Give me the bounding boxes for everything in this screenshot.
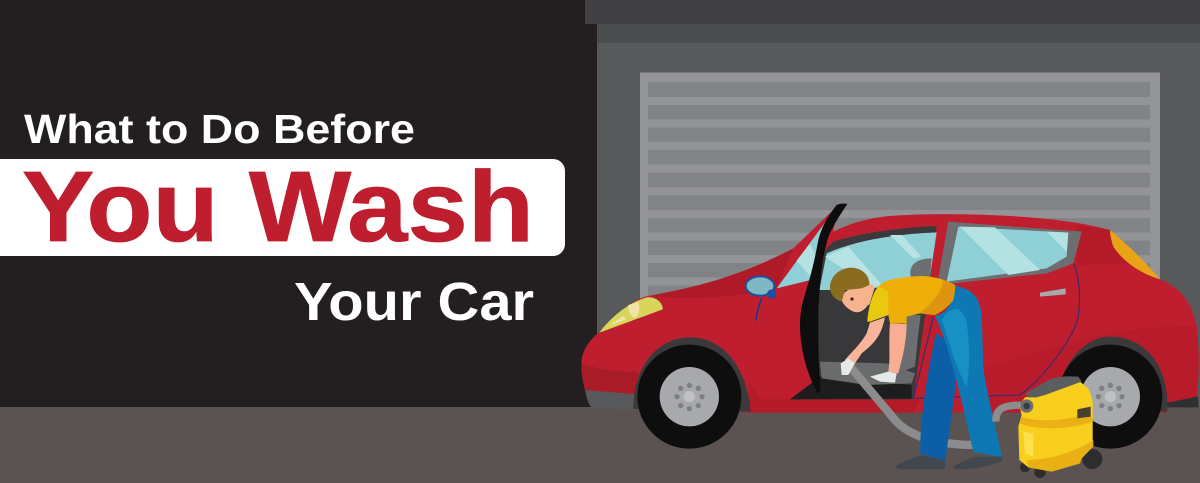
vacuum lower shade bbox=[1027, 440, 1093, 472]
vent bbox=[1077, 407, 1091, 418]
front wheel bbox=[633, 337, 751, 449]
headlight bbox=[599, 297, 663, 333]
shirt bbox=[867, 276, 955, 323]
title bbox=[0, 106, 565, 332]
tail light bbox=[1110, 230, 1160, 279]
casters bbox=[1020, 449, 1102, 478]
rear lower shade bbox=[983, 326, 1199, 413]
roller door bbox=[640, 72, 1160, 372]
banner bbox=[0, 159, 565, 256]
floor mat bbox=[790, 377, 912, 399]
illustration: car and person bbox=[581, 204, 1199, 478]
sill shade bbox=[748, 382, 920, 413]
lid bbox=[1025, 376, 1082, 397]
ground bbox=[0, 407, 1200, 483]
vacuum crease bbox=[1020, 413, 1093, 428]
vacuum hose bbox=[852, 368, 977, 445]
car body bbox=[581, 205, 1199, 413]
rear window bbox=[938, 222, 1082, 284]
headlight glare bbox=[608, 302, 639, 326]
vacuum highlight bbox=[1023, 432, 1033, 457]
hair bbox=[830, 268, 869, 302]
nozzle port bbox=[1020, 399, 1033, 413]
cabin glare bbox=[825, 235, 922, 287]
rear lower trim bbox=[1160, 397, 1198, 407]
eye bbox=[850, 297, 854, 301]
leg highlight bbox=[942, 309, 969, 387]
far arm bbox=[888, 323, 907, 373]
back leg bbox=[920, 333, 957, 461]
heading line 2: You Wash bbox=[22, 151, 534, 263]
seat cushion bbox=[820, 362, 915, 385]
cabin glass bbox=[819, 232, 937, 290]
shirt back shade bbox=[920, 280, 955, 315]
hose to vacuum bbox=[996, 405, 1025, 422]
front bumper bbox=[585, 389, 637, 410]
hood shade bbox=[648, 248, 793, 298]
shoes bbox=[896, 455, 1002, 469]
mirror bbox=[746, 276, 776, 321]
heading line 3: Your Car bbox=[294, 272, 534, 332]
vacuum body bbox=[1018, 382, 1093, 472]
front lower shade bbox=[582, 363, 638, 394]
shirt chest bbox=[867, 287, 888, 322]
interior shadow bbox=[818, 290, 890, 370]
person bbox=[830, 268, 1002, 469]
gloves bbox=[841, 358, 897, 383]
heading line 1: What to Do Before bbox=[24, 106, 415, 152]
door handle bbox=[1040, 288, 1066, 297]
vacuum cleaner bbox=[996, 376, 1102, 478]
seat headrest bbox=[910, 258, 932, 277]
neck bbox=[862, 282, 875, 305]
near arm bbox=[845, 317, 885, 363]
face bbox=[842, 287, 869, 312]
windshield bbox=[777, 207, 837, 288]
seat back bbox=[897, 315, 921, 373]
door opening bbox=[790, 226, 937, 399]
front leg bbox=[935, 285, 1002, 457]
open door bbox=[800, 204, 847, 393]
rear wheel bbox=[1053, 337, 1167, 449]
rear shoulder shade bbox=[1077, 225, 1147, 266]
car bbox=[581, 204, 1199, 449]
garage building bbox=[585, 0, 1200, 409]
windshield glare bbox=[797, 243, 818, 276]
door seam bbox=[913, 263, 1080, 398]
